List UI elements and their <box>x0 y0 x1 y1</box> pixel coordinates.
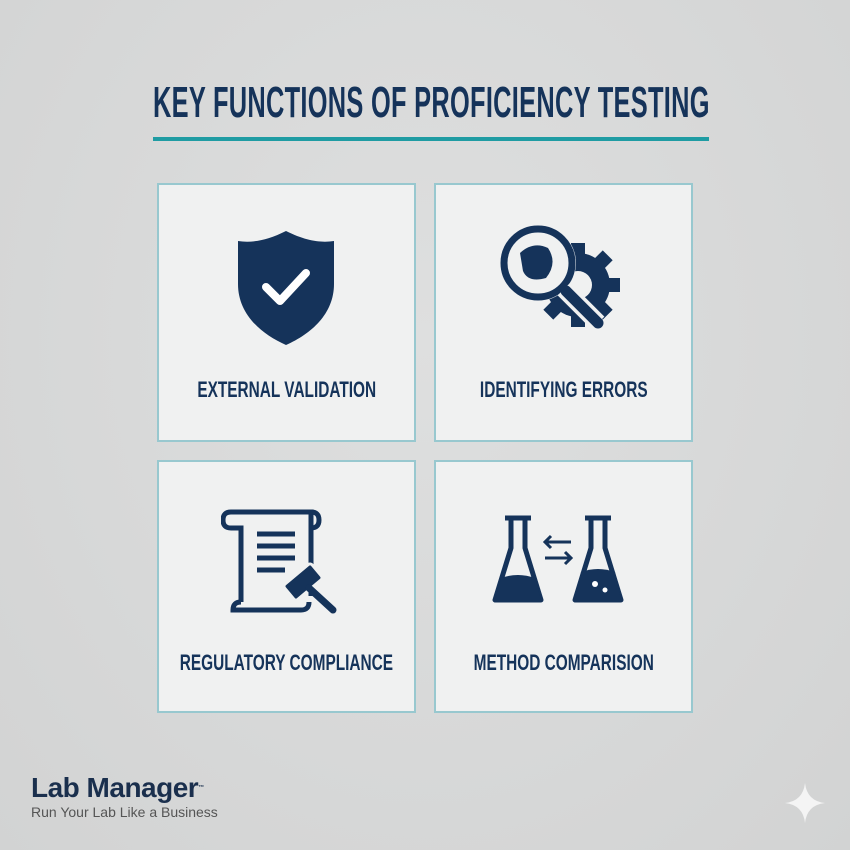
label: REGULATORY COMPLIANCE <box>180 650 393 675</box>
logo <box>31 772 218 820</box>
title: KEY FUNCTIONS OF PROFICIENCY TESTING <box>153 78 710 127</box>
label: EXTERNAL VALIDATION <box>197 377 376 402</box>
label: METHOD COMPARISION <box>473 650 654 675</box>
icon: flasks with arrows <box>492 516 624 602</box>
label: IDENTIFYING ERRORS <box>480 377 647 402</box>
icon: scroll with gavel <box>221 510 336 614</box>
logo: Run Your Lab Like a Business <box>31 804 218 820</box>
panel: method comparison <box>434 460 693 713</box>
icon: magnifier and gear <box>500 226 620 328</box>
logo: Lab Manager™ <box>31 772 204 803</box>
panel: regulatory compliance <box>157 460 416 713</box>
panel: identifying errors <box>434 183 693 442</box>
icon: shield <box>238 231 334 345</box>
panel: external validation <box>157 183 416 442</box>
icon: sparkle <box>786 784 824 822</box>
